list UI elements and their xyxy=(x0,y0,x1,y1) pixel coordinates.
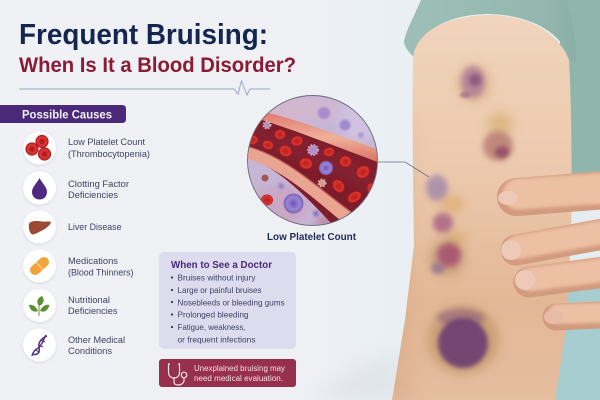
cause: nutritional: Nutritional xyxy=(68,295,110,305)
blood vessel xyxy=(248,113,377,222)
arm with bruises xyxy=(392,15,572,400)
finger three xyxy=(515,268,600,290)
symptom list: Prolonged bleeding xyxy=(178,310,249,320)
cause: low platelet count: (Thrombocytopenia) xyxy=(68,149,150,159)
possible causes heading: Possible Causes xyxy=(22,110,112,122)
cause: liver disease: Liver Disease xyxy=(68,222,122,232)
symptom list: Nosebleeds or bleeding gums xyxy=(178,298,284,308)
shirt sleeve xyxy=(404,0,576,62)
callout: medical evaluation: need medical evaluation. xyxy=(194,374,283,383)
cause: other medical conditions: Conditions xyxy=(68,346,113,356)
cause: nutritional xyxy=(23,289,118,322)
finger two xyxy=(501,229,600,260)
symptom list: Bruises without injury xyxy=(178,272,256,282)
cause: other medical conditions: Other Medical xyxy=(68,335,125,345)
magnified vessel circle xyxy=(247,95,378,226)
icon: red blood cells xyxy=(26,136,50,160)
symptom list: or frequent infections xyxy=(178,334,256,344)
cause: low platelet count: Low Platelet Count xyxy=(68,137,146,147)
possible causes heading xyxy=(0,105,126,123)
cause: low platelet count xyxy=(23,132,150,164)
bruise: large lower xyxy=(427,306,499,374)
symptom list xyxy=(171,272,284,344)
finger four xyxy=(544,310,600,324)
cause: liver disease xyxy=(23,210,122,244)
cause: nutritional: Deficiencies xyxy=(68,306,118,316)
title xyxy=(19,19,296,77)
icon: leaves xyxy=(29,296,50,316)
finger one xyxy=(498,187,600,205)
title line two: When Is It a Blood Disorder? xyxy=(19,54,296,77)
bruise: lower left xyxy=(429,239,465,277)
callout: medical evaluation xyxy=(159,359,296,387)
cause: clotting factor: Clotting Factor xyxy=(68,179,129,189)
cause: clotting factor xyxy=(23,172,129,204)
circle caption: Low Platelet Count xyxy=(267,232,357,243)
red blood cells xyxy=(247,130,375,206)
bruise: mid arm xyxy=(483,112,513,161)
platelets and white cells xyxy=(262,107,364,216)
cause: medications: (Blood Thinners) xyxy=(68,268,134,278)
callout: medical evaluation: Unexplained bruising may xyxy=(194,364,285,373)
cause: medications: Medications xyxy=(68,256,119,266)
icon: pill xyxy=(28,255,51,277)
symptom list: Fatigue, weakness, xyxy=(178,322,246,332)
hand fingers xyxy=(498,187,600,324)
icon: dna helix xyxy=(32,335,47,356)
torso and shirt background xyxy=(555,0,600,400)
panel: when to see a doctor xyxy=(159,252,296,349)
panel: when to see a doctor: When to See a Doctor xyxy=(171,259,272,271)
title line one: Frequent Bruising: xyxy=(19,19,268,51)
icon: stethoscope xyxy=(168,364,187,385)
symptom list: Large or painful bruises xyxy=(178,285,262,295)
icon: blood drop xyxy=(32,178,47,200)
cause: clotting factor: Deficiencies xyxy=(68,190,119,200)
cause: medications xyxy=(23,250,134,282)
leader line xyxy=(378,162,429,177)
bruise: upper arm xyxy=(457,65,491,103)
bruise: left upper cluster xyxy=(426,175,468,245)
cause: other medical conditions xyxy=(23,328,125,362)
divider with heartbeat xyxy=(19,81,270,95)
icon: liver xyxy=(29,221,51,234)
